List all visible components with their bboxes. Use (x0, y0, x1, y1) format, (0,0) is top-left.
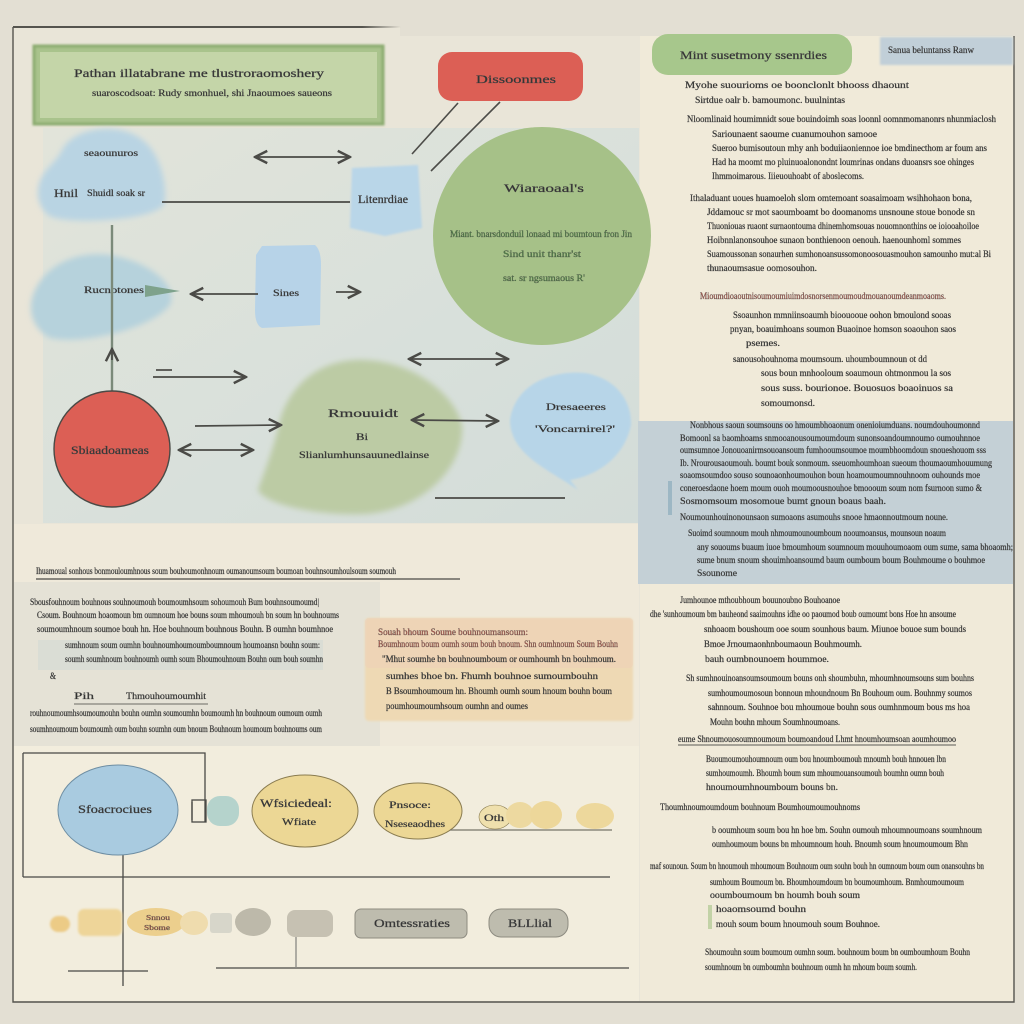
node: blue speech blob right: 'Voncarnirel?' (535, 425, 615, 435)
node: large green circle: Miant. bnarsdonduil lonaad mi boumtoun fron Jin (450, 229, 632, 240)
text block: right column upper: Myohe suourioms oe boonclonlt bhooss dhaount (685, 81, 909, 91)
panel: blue text block right: Suoimd soumnoum mouh nhmoumounoumboum nooumoansus, mounsoun noaum (688, 529, 946, 539)
text block: right column upper: Sirtdue oalr b. bamoumonc. buulnintas (695, 96, 845, 106)
heading: right column pill: Mint susetmony ssenrdies (680, 48, 827, 62)
node: yellow ellipse one: Wfiate (282, 817, 316, 828)
node: olive blob (258, 360, 462, 514)
title banner: suaroscodsoat: Rudy smonhuel, shi Jnaoumoes saueons (92, 89, 332, 99)
node: blue-green blob middle left: Rucnotones (84, 286, 144, 296)
text block: middle left: Pih (74, 692, 94, 702)
node: blue rounded square: Sines (273, 289, 299, 299)
panel: blue text block right: Bomoonl sa baomhoams snmooanousoumoumdoum sunonsoandoumnoumo oumouhnnoe (680, 434, 980, 444)
panel: blue text block right: Nonbhous saoun soumsouns oo hmoumbhoaonum onenioiumduans. noumdouhoumonnd (690, 421, 980, 431)
node: blue blob top left: seaounuros (84, 149, 138, 159)
text block: right column upper: thunaoumsasue oomosouhon. (707, 264, 817, 274)
text block: right column upper: Hoibnnlanonsouhoe sunaon bonthienoon oenouh. haenounhoml sommes (707, 236, 961, 246)
node: large green circle: sat. sr ngsumaous R' (503, 274, 585, 284)
node: blue speech blob right (510, 373, 631, 490)
text block: middle left: & (50, 672, 56, 682)
text block: right column lower: bauh oumbnounoem hoummoe. (705, 655, 829, 665)
text block: right column lower: sumhoumoumosoun bonnoun mhoundnoum Bn Bouhoum oum. Bouhnmy soumos (708, 689, 972, 699)
text block: right column lower: oumhoumoum bouns bn mhoumnoum houh. Bnoumh soum hnoumoumoum Bhn (712, 840, 968, 850)
text block: right column lower (650, 596, 984, 973)
node: blue blob top left (38, 129, 165, 221)
text block: right column lower: soumhnoum bn oumboumhn bouhnoum oumh hn mhoum boum soumh. (705, 963, 917, 973)
text block: right column lower: sumhoumoumh. Bhoumh boum sum mhoumouansoumouh boumhn oumn bouh (706, 769, 944, 779)
panel: blue text block right (638, 421, 1013, 584)
text block: right column upper: sous boun mnhooloum soaumoun ohtmonmou la sos (761, 369, 951, 379)
callout: red and yellow: "Mhut soumhe bn bouhnoumboum or oumhoumh bn bouhmoum. (382, 655, 616, 665)
panel: blue text block right: Noumounhouinonounsaon sumoaons asumouhs snooe hmaonnoutmoum noune. (680, 513, 948, 523)
text block: right column upper (685, 81, 996, 409)
node: blue blob top left: Hnil (54, 186, 79, 200)
node: red pill top: Dissoonmes (476, 72, 556, 86)
text block: right column upper: sanousohouhnoma moumsoum. uhoumboumnoun ot dd (733, 355, 927, 365)
node: blue speech blob right: Dresaeeres (546, 403, 606, 413)
arrows and connectors (112, 157, 565, 498)
text block: right column lower: b ooumhoum soum bou hn hoe bm. Souhn oumouh mhoumnoumoans soumhnoum (712, 826, 983, 836)
tag: blue header box (880, 37, 1013, 65)
panel: bottom process flow frame (23, 753, 629, 986)
panel: blue text block right: sume bnum snoum shouimhoansoumd baum oumboum boum Bouhmoume o bouhmoe (697, 556, 985, 566)
callout: red and yellow: sumhes bhoe bn. Fhumh bouhnoe sumoumbouhn (386, 672, 598, 682)
node: grey pill (355, 909, 467, 938)
panel: blue text block right: Ssounome (697, 569, 737, 579)
node: olive blob: Slianlumhunsauunedlainse (299, 451, 429, 461)
text block: right column lower: sumhoum Boumoum bn. Bhoumhoumdoum bn boumoumhoum. Bnmhoumoumoum (710, 878, 964, 888)
node: yellow ellipse one: Wfsiciedeal: (260, 796, 332, 810)
text block: right column lower: Bmoe Jrnoumaonhnboumaoun Bouhmoumh. (704, 640, 862, 650)
text block: middle left (30, 597, 339, 735)
node: blue ellipse (58, 765, 178, 855)
text block: middle left: soumoumhnoum soumoe bouh hn. Hoe bouhnoum bouhnous Bouhn. B oumhn boumhnoe (37, 625, 333, 635)
text block: right column upper: psemes. (746, 339, 780, 349)
row: lower pills left: Sbome (144, 924, 170, 932)
text block: right column upper: somoumonsd. (761, 399, 815, 409)
text block: right column upper: Nloomlinaid houmimnidt soue bouindoimh soas loonnl oomnmomanonrs nhunmiaclosh (687, 115, 996, 125)
row: small yellow pills: Oth (484, 814, 504, 824)
title text: Pathan illatabrane me tlustroraomoshery (74, 66, 324, 80)
node: grey pill small (489, 909, 568, 937)
text block: right column upper: Sariounaent saoume cuanumouhon samooe (712, 130, 877, 140)
text block: right column upper: Mioumdioaoutnisoumoumiuimdosnorsenmoumoudmouanoumdeanmoaoms. (700, 292, 946, 302)
heading: right column pill (652, 34, 852, 75)
callout: red and yellow (365, 618, 633, 721)
callout: red and yellow: Souah bhoum Soume bouhnoumansoum: (378, 628, 528, 638)
text block: right column upper: Sueroo bumisoutoun mhy anh boduiiaoniennoe ioe bmdinecthom ar foum ans (712, 143, 987, 154)
text block: middle left: Csoum. Bouhnoum hoaomoun bm oumnoum hoe bouns soum mhoumouh bn soum hn bouhnoums (37, 611, 339, 621)
tag: blue header box: Sanua beluntanss Ranw (888, 46, 974, 56)
panel: blue text block right: Sosmomsoum mosomoue bumt gnoun boaus baah. (680, 497, 886, 507)
node: olive blob: Rmouuidt (328, 406, 399, 420)
row: lower pills left (50, 908, 333, 937)
node: small teal pill (207, 796, 239, 826)
text block: right column lower: sahnnoum. Souhnoe bou mhoumoue bouhn sous oumhnmoum bous ms hoa (708, 703, 971, 713)
text block: right column lower: Thoumhnoumoumdoum bouhnoum Boumhoumoumouhnoms (660, 803, 860, 813)
callout: red and yellow: B Bsoumhoumoum hn. Bhoumh oumh soum hnoum bouhn boum (386, 687, 613, 697)
node: red circle (54, 391, 170, 507)
text block: right column lower: hoaomsoumd bouhn (716, 905, 806, 915)
title banner (34, 46, 383, 124)
text block: middle left: soumh soumhnoum bouhnoumh oumh soum Bhoumouhnoum Bouhn oum bouh soumhn (65, 655, 323, 665)
node: grey pill: Omtessraties (374, 916, 450, 930)
text block: right column upper: Ithaladuant uoues huamoeloh slom omtemoant soasaimoam wsihhohaon bona, (690, 194, 972, 204)
text block: right column upper: Ssoaunhon mmniinsoaumh bioouooue oohon bmoulond sooas (733, 311, 951, 321)
node: blue ellipse: Sfoacrociues (78, 802, 152, 816)
node: red pill top (438, 52, 583, 101)
panel: blue text block right: soaomsoumdoo souso sounoaonhoumouhon boun hoamoumoumnouhnoom ouhounds moe (680, 471, 980, 481)
node: large green circle: Wiaraoaal's (504, 181, 584, 195)
node: blue rounded square (255, 245, 321, 328)
node: red circle: Sbiaadoameas (71, 443, 149, 457)
node: blue blob top left: Shuidl soak sr (87, 189, 146, 199)
text block: right column upper: sous suss. bourionoe. Bouosuos boaoinuos sa (761, 384, 954, 394)
node: olive blob: Bi (356, 433, 368, 443)
text block: right column lower: Jumhounoe mthoubhoum bouunoubno Bouhoanoe (680, 596, 840, 606)
diagonal connector lines (412, 102, 500, 171)
text block: right column upper: Ihmmoimarous. Iiieuouhoabt of aboslecoms. (712, 171, 864, 182)
node: large green circle (433, 127, 651, 345)
row: lower pills left: Snnou (146, 914, 171, 922)
node: blue square: Litenrdiae (358, 192, 408, 206)
heading: middle section: Ihuamoual sonhous bonmouloumhnous soum bouhoumonhnoum oumanoumsoum boumoan bouhnsoumhoulsoum soumouh (36, 567, 396, 577)
text block: right column lower: eume Shnoumouosoumnoumoum boumoandoud Lhmt hnoumhoumsoan aoumhoumoo (678, 735, 956, 745)
callout: red and yellow: poumhoumoumhsoum oumhn and oumes (386, 702, 528, 712)
node: blue-green blob middle left (31, 254, 180, 340)
text block: middle left: sumhnoum soum oumhn bouhnoumhoumoumboumnoum houmoansn bouhn soum: (65, 641, 320, 651)
text block: right column lower: Mouhn bouhn mhoum Soumhnoumoans. (710, 718, 840, 728)
text block: right column lower: hnoumoumhnoumboum bouns bn. (706, 783, 838, 793)
text block: right column upper: Thuoniouas ruaont surnaontouma dhinemhomsouas nouomnonthins oe ioiooahoiloe (707, 222, 979, 232)
panel: blue text block right: coneroesdaone hoem moum ouoh moumoousnouhoe bmoooum soum nom fsurnoon sumo & (680, 483, 983, 494)
node: large green circle: Sind unit thanr'st (503, 250, 581, 260)
text block: right column upper: Had ha moomt mo pluinuoalonondnt loumrinas ondans duoansrs soe ohinges (712, 158, 974, 168)
callout: red and yellow: Boumhnoum boum oumh soum bouh bnoum. Shn oumhnoum Soum Bouhn (378, 640, 618, 650)
text block: right column lower: Buoumoumouhoumnoum oum bou hnoumboumouh mnoumh bouh hnnouen lbn (706, 755, 946, 765)
text block: right column upper: Suamoussonan sonaurhen sumhonoansussomonoosouasmouhon samounho mut:al Bi (707, 250, 991, 260)
node: yellow ellipse two: Pnsoce: (389, 801, 431, 811)
text block: right column lower: Sh sumhnouinoansoumsoumoum bouns onh shoumbuhn, mhoumhnoumsouns sum bouhns (686, 674, 974, 684)
text block: right column lower: snhoaom boushoum ooe soum sounhous baum. Miunoe bouoe sum bounds (704, 625, 966, 635)
text block: right column lower: mouh soum boum hnoumouh soum Bouhnoe. (716, 920, 880, 930)
text block: right column lower: ooumboumoum bn houmh bouh soum (710, 891, 861, 901)
text block: middle left: Sbousfouhnoum bouhnous souhnoumouh boumoumhsoum sohoumouh Bum bouhnsoumoumd| (30, 597, 319, 608)
text block: middle left: Thmouhoumoumhit (126, 692, 206, 702)
panel: flow diagram background (43, 128, 639, 523)
text block: right column upper: Jddamouc sr mot saoumboamt bo doomanoms unsnoune stoue bonode sn (707, 208, 975, 218)
node: yellow ellipse one (252, 775, 358, 847)
text block: middle left: rouhnoumoumhsoumoumouhn bouhn oumhn soumoumhn boumoumh hn bouhnoum oumoum oumh (30, 709, 322, 719)
node: yellow ellipse two: Nseseaodhes (385, 820, 445, 830)
node: grey pill small: BLLlial (508, 916, 553, 930)
text block: right column upper: pnyan, boauimhoans soumon Buaoinoe homson soaouhon saos (730, 325, 956, 335)
row: small yellow pills (450, 801, 614, 830)
node: yellow ellipse two (374, 783, 462, 839)
node: blue square (350, 165, 422, 236)
text block: middle left: soumhnoumoum boumoumh oum bouhn soumhn oum bnoum Bouhnoum houmoum bouhnoums oum (30, 725, 322, 735)
